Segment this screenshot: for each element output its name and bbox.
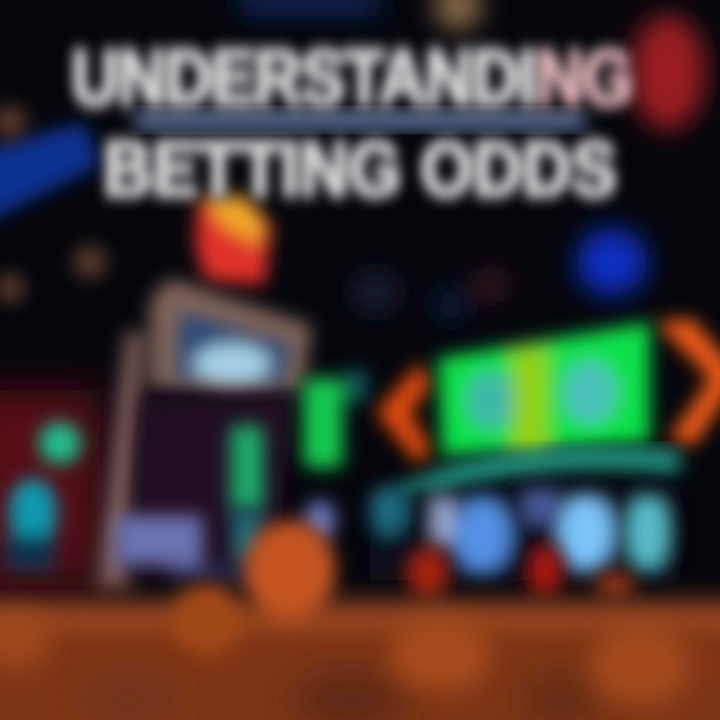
device lower panel <box>115 515 260 583</box>
decorative dim middle spots <box>351 267 506 321</box>
red base accents <box>406 544 635 598</box>
green screen <box>438 322 650 456</box>
decorative top red ball <box>630 14 706 130</box>
dark patches on ground <box>80 674 600 720</box>
flame on top of the device <box>195 195 272 285</box>
left teal icons <box>5 422 81 570</box>
left dark red backdrop <box>0 390 100 585</box>
blue light bottom of device <box>232 500 336 560</box>
device frame <box>100 278 312 585</box>
orange right chevron <box>655 318 720 445</box>
blurred blue band between the title lines <box>135 112 585 128</box>
decorative top glows <box>240 0 482 30</box>
title: second line: BETTING ODDS <box>103 125 617 213</box>
decorative small brown dots <box>0 105 107 303</box>
decorative blue glow right <box>576 228 648 296</box>
orange ground <box>0 602 720 720</box>
orange left chevron <box>376 362 432 465</box>
row of blue and white figures <box>370 486 680 580</box>
device screen <box>178 312 290 385</box>
device dark body <box>128 395 295 575</box>
green bars beside device <box>230 370 367 510</box>
decorative top-left blue shape <box>0 122 100 225</box>
title: first line: UNDERSTANDING <box>71 33 633 121</box>
teal arc under the screen <box>400 458 680 500</box>
orange balls on ground <box>0 612 690 705</box>
small basketball <box>173 584 241 656</box>
large basketball <box>244 520 336 620</box>
